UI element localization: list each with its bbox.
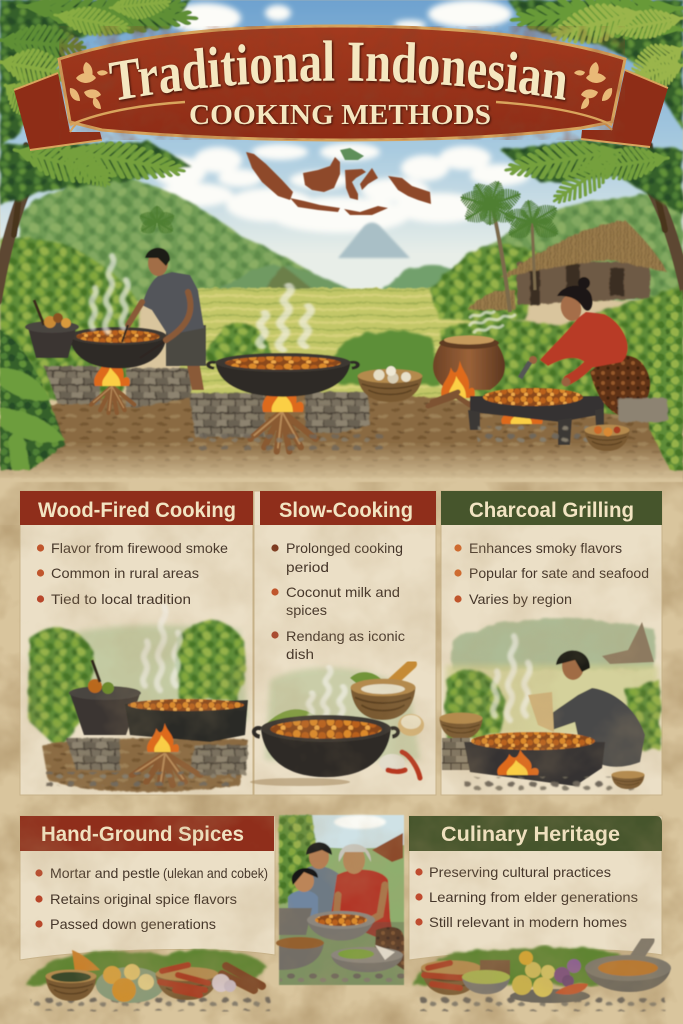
foreground right plants [646,290,683,470]
Indonesia map [246,148,431,215]
panel: wood-fired cooking [20,491,253,795]
sky [300,815,404,848]
man cooking [122,248,206,390]
woman cooking [520,277,668,422]
card header [409,816,662,851]
card header: Slow-Cooking [279,499,413,522]
banner main [59,26,625,140]
card body [441,491,662,795]
bullet list: Popular for sate and seafood [469,565,649,581]
house [468,220,667,310]
foliage [279,815,318,905]
bullet list: Preserving cultural practices [429,864,611,880]
hazy foliage midground [0,237,683,430]
bullet list: Passed down generations [50,916,216,932]
bullet list: Learning from elder generations [429,889,638,905]
scene: village landscape with cooking [0,0,683,482]
bullet list [271,540,405,662]
palm trees [138,178,561,312]
bullet list: Flavor from firewood smoke [51,540,228,556]
card header [441,491,662,525]
card header: Culinary Heritage [441,823,620,846]
bullet list: Varies by region [469,591,572,607]
title banner [14,24,668,151]
subtitle text: COOKING METHODS [189,99,491,131]
bullet list: Common in rural areas [51,565,199,581]
palm canopy top left [0,0,196,205]
bullet list: (ulekan and cobek) [163,865,268,881]
bullet list [35,865,268,932]
bullet list [454,540,649,607]
bullet list: spices [286,602,327,618]
left stove [44,256,192,413]
banner tails [14,70,668,150]
card header: Hand-Ground Spices [41,823,244,846]
bullet list [415,864,638,930]
roof [372,833,403,862]
illustration: man at charcoal grill [439,619,660,790]
basket of ingredients [358,366,422,402]
clay pot on fire [428,305,517,406]
palm canopy top right [500,0,683,215]
bullet list: Rendang as iconic [286,628,405,644]
mountain [338,222,410,258]
card body [20,491,253,795]
rice terraces [180,288,510,400]
panel: family cooking scene [276,815,404,985]
card body [254,491,436,795]
panel: charcoal grilling [439,491,662,795]
child [288,868,318,918]
title text: Traditional Indonesian [108,40,568,102]
panel: culinary heritage [409,816,671,1011]
bullet list: Mortar and pestle [50,865,160,881]
bullet list: Tied to local tradition [51,591,191,607]
illustration: wood fire with pots [28,606,248,792]
bullet list: Still relevant in modern homes [429,914,627,930]
bullet list: Coconut milk and [286,584,400,600]
bullet list: Enhances smoky flavors [469,540,622,556]
tree trunks [0,145,683,300]
bullet list [37,540,228,607]
card body [20,816,275,960]
card header: Charcoal Grilling [469,499,634,522]
panel: slow-cooking [250,491,436,795]
sky with clouds [0,0,683,300]
charcoal grill [468,388,604,445]
parchment mottling over panels [0,525,683,1024]
bowls [276,908,404,985]
card header [20,816,274,851]
grandmother [330,844,404,970]
bullet list: Retains original spice flavors [50,891,237,907]
card body [409,816,662,960]
card header: Wood-Fired Cooking [38,499,236,522]
ground [0,393,683,478]
bullet list: dish [286,646,314,662]
central stove with big pot [185,285,385,452]
bullet list: period [286,559,329,575]
floral ornaments [70,62,612,109]
illustration: spices and ingredients [26,950,270,1011]
illustration: harvest and mortar [412,940,671,1011]
hills [20,177,683,300]
panel: hand-ground spices [20,816,275,1011]
bowl of food [584,425,630,451]
card header [260,491,436,525]
small side pot [25,300,79,358]
bullet list: Prolonged cooking [286,540,403,556]
card header [20,491,253,525]
banner flourish lines [70,102,612,125]
boy [304,842,340,918]
illustration: rendang wok and mortar [250,664,424,786]
foreground left plants [0,330,65,470]
